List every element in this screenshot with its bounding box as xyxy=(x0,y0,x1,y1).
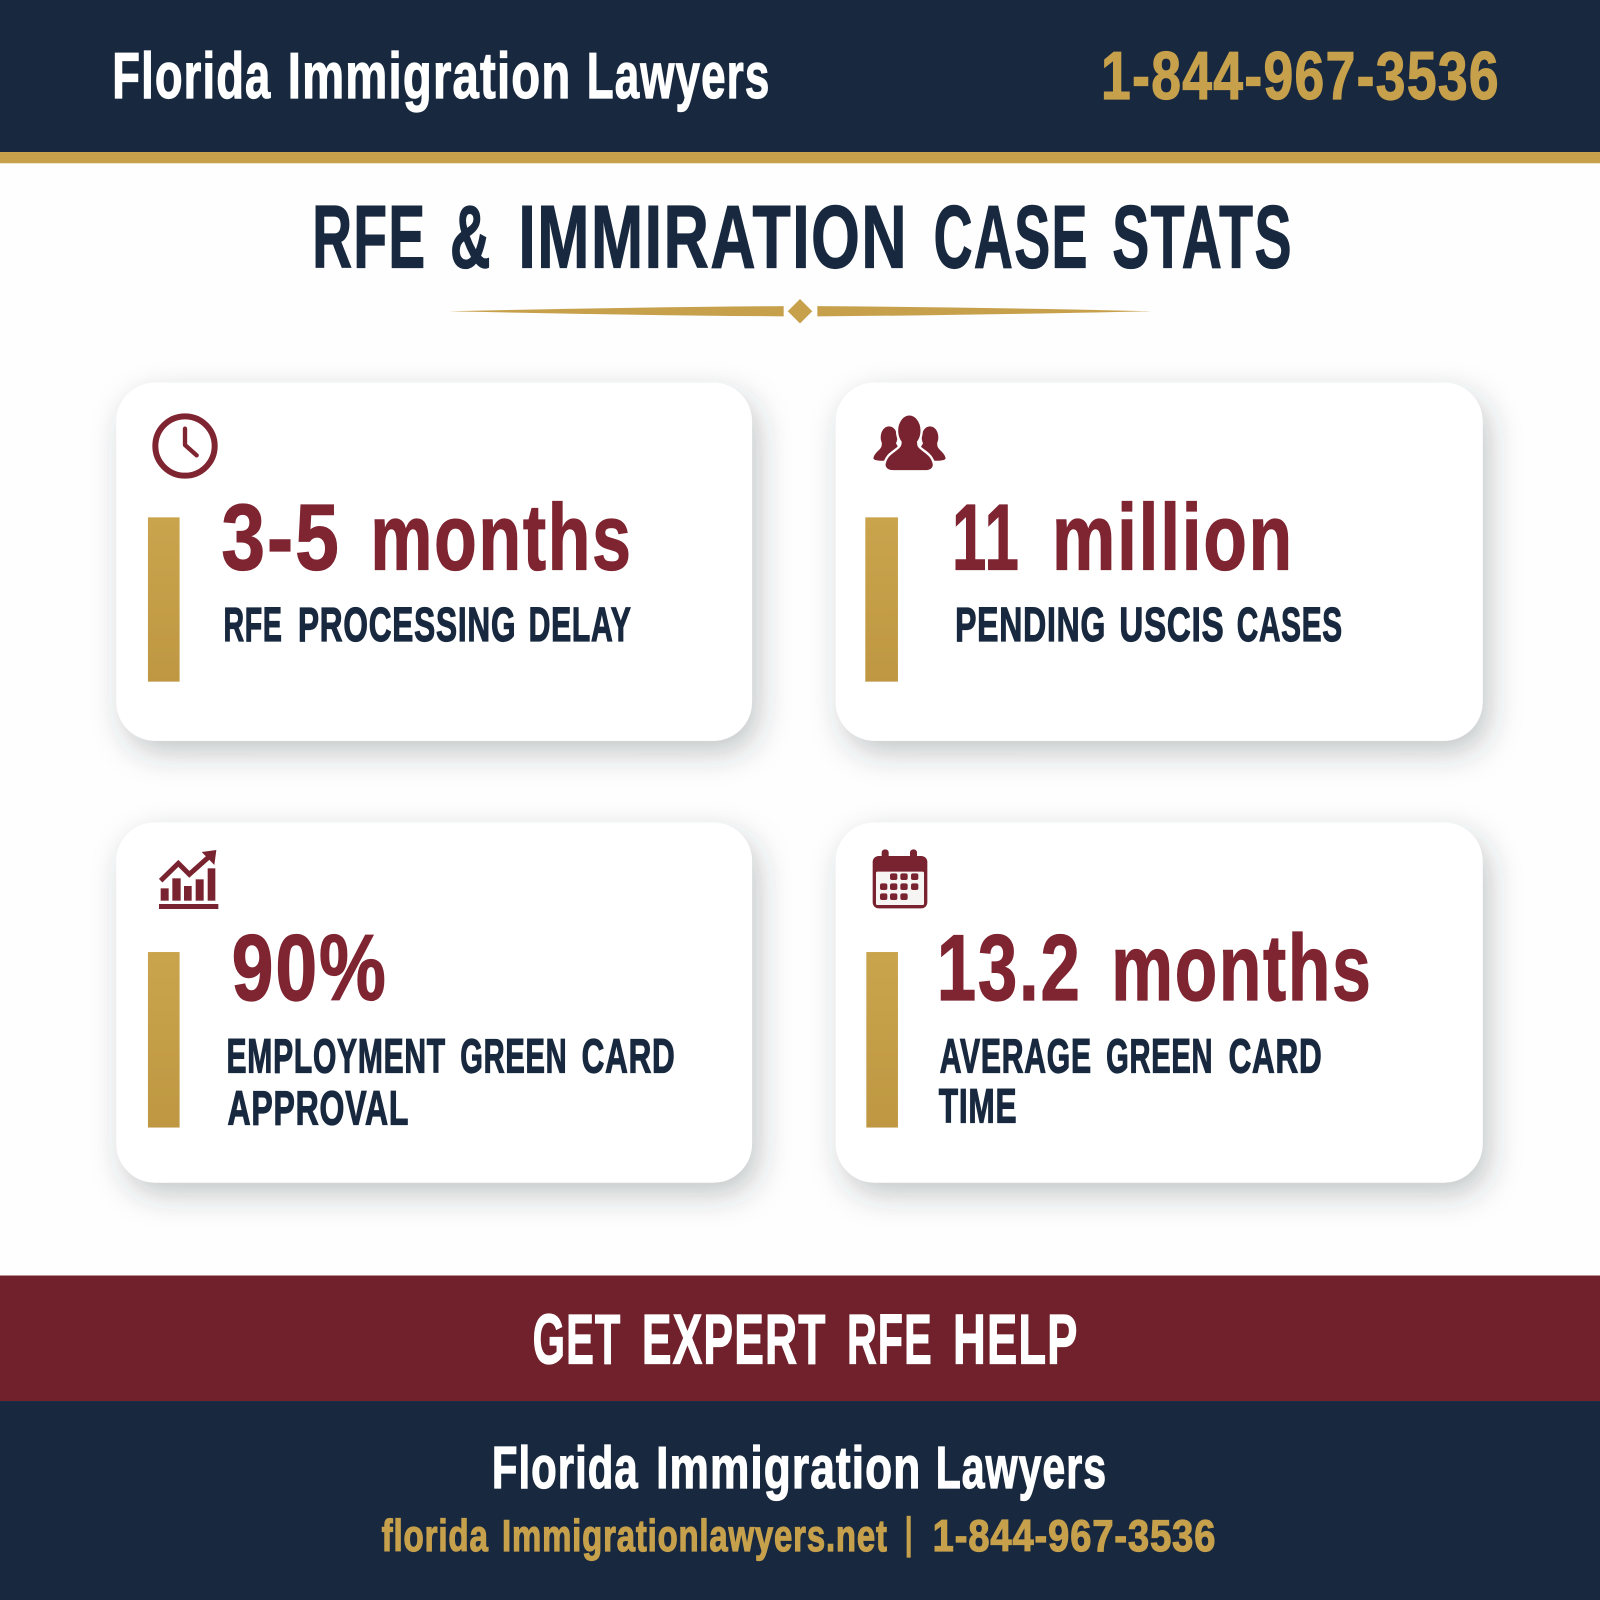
header firm name: Florida xyxy=(112,39,271,112)
stat label: DELAY xyxy=(529,599,632,652)
call to action text: GET xyxy=(533,1299,621,1378)
title: STATS xyxy=(1112,187,1293,286)
footer website and phone: florida xyxy=(382,1510,489,1561)
stat value xyxy=(952,484,1294,589)
footer firm name: Immigration xyxy=(656,1434,921,1501)
title: IMMIRATION xyxy=(518,187,908,286)
stat label xyxy=(939,1030,1322,1133)
title: RFE xyxy=(312,187,427,286)
stat label: CASES xyxy=(1237,599,1343,652)
footer website and phone: Immigrationlawyers.net xyxy=(502,1510,888,1561)
title xyxy=(312,187,1293,286)
stat label: PROCESSING xyxy=(298,599,516,652)
stat value: million xyxy=(1052,484,1294,589)
stat label: USCIS xyxy=(1119,599,1224,652)
icon: people xyxy=(873,414,946,471)
icon: clock xyxy=(155,416,215,476)
stat label: GREEN xyxy=(460,1030,567,1083)
footer band xyxy=(0,1401,1600,1600)
stat value: 11 xyxy=(952,484,1020,589)
stat value: 3-5 xyxy=(221,484,341,589)
header firm name xyxy=(112,39,770,112)
stat value: months xyxy=(1111,915,1372,1020)
gold accent bar xyxy=(866,952,898,1128)
stat value xyxy=(937,915,1372,1020)
call to action band xyxy=(0,1276,1600,1401)
stat label xyxy=(227,1030,676,1135)
stat label: EMPLOYMENT xyxy=(227,1030,446,1083)
panel: employment green card approval xyxy=(116,822,752,1183)
header firm name: Immigration xyxy=(288,39,571,112)
footer website and phone: 1-844-967-3536 xyxy=(933,1510,1216,1561)
panel: RFE processing delay xyxy=(116,383,752,741)
header phone number: 1-844-967-3536 xyxy=(1101,39,1500,114)
footer firm name: Florida xyxy=(492,1434,639,1501)
title divider with diamond xyxy=(449,299,1151,323)
stat label: APPROVAL xyxy=(228,1082,409,1135)
stat label xyxy=(955,599,1343,652)
stat label: AVERAGE xyxy=(940,1030,1092,1083)
panel: pending USCIS cases xyxy=(836,383,1483,741)
stat value xyxy=(221,484,633,589)
stat value: 13.2 xyxy=(937,915,1082,1020)
footer website and phone xyxy=(382,1510,1216,1561)
call to action text: RFE xyxy=(847,1299,933,1378)
footer firm name xyxy=(492,1434,1107,1501)
gold accent bar xyxy=(148,952,180,1128)
stat label: CARD xyxy=(582,1030,676,1083)
call to action text xyxy=(533,1299,1079,1378)
stat label: PENDING xyxy=(955,599,1106,652)
call to action text: HELP xyxy=(953,1299,1079,1378)
stat label: CARD xyxy=(1229,1030,1322,1083)
stat value: 90% xyxy=(232,915,388,1020)
header firm name: Lawyers xyxy=(587,39,770,112)
stat label: RFE xyxy=(223,599,283,652)
stat label: TIME xyxy=(939,1080,1017,1133)
panel: average green card time xyxy=(836,822,1483,1183)
gold accent bar xyxy=(865,517,898,682)
header band xyxy=(0,0,1600,163)
call to action text: EXPERT xyxy=(642,1299,827,1378)
footer firm name: Lawyers xyxy=(936,1434,1107,1501)
title: & xyxy=(450,187,492,286)
title: CASE xyxy=(934,187,1089,286)
gold accent bar xyxy=(148,517,180,682)
icon: rising bar chart xyxy=(159,850,218,909)
icon: calendar xyxy=(873,849,927,908)
stat value: months xyxy=(370,484,633,589)
stat label: GREEN xyxy=(1106,1030,1213,1083)
